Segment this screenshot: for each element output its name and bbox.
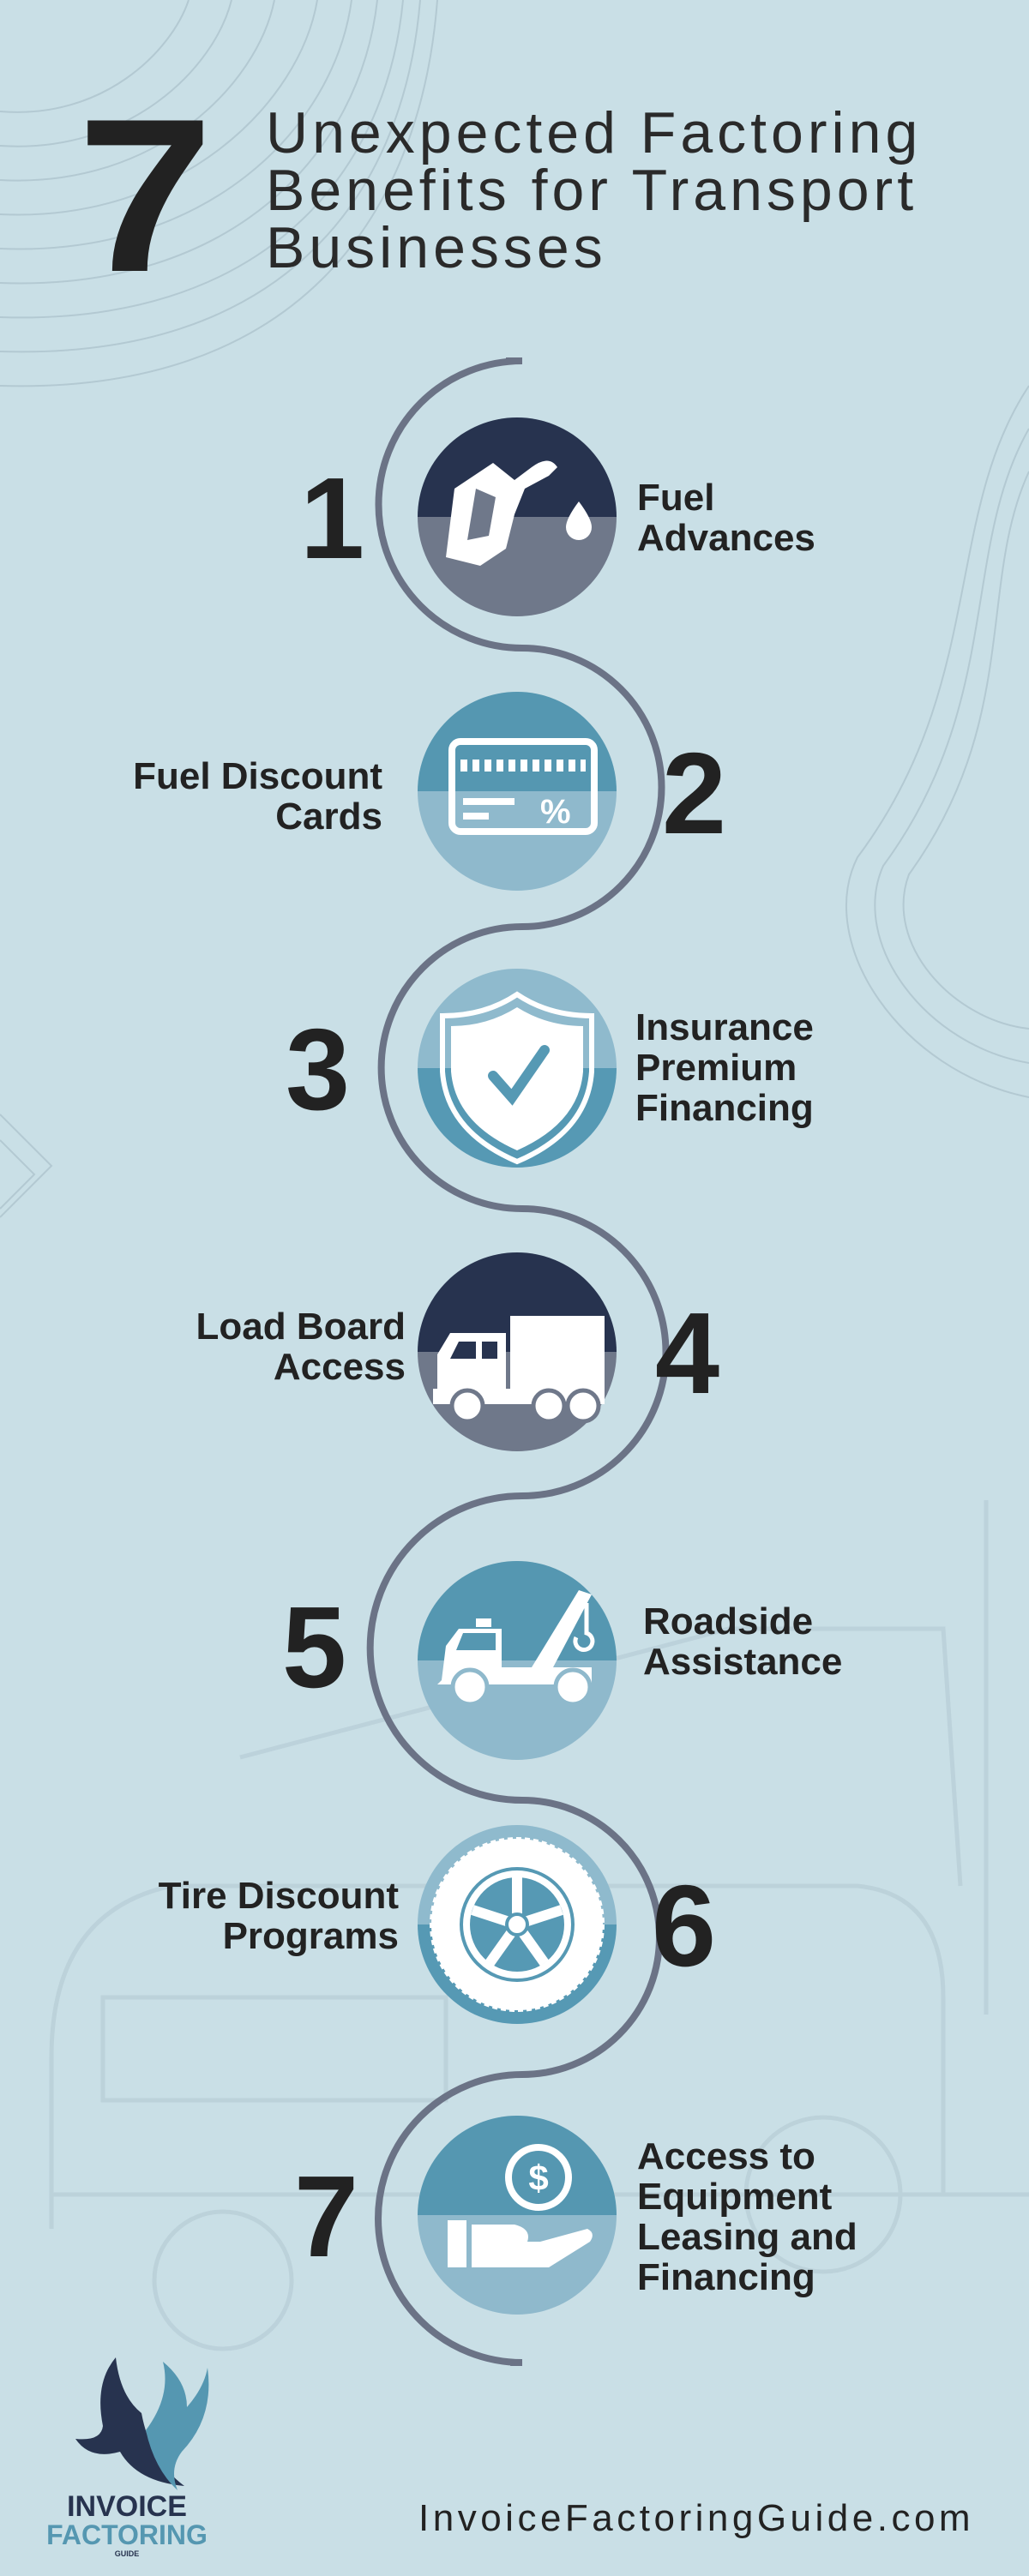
label: Equipment: [637, 2176, 833, 2218]
item 5: roadside: [282, 1561, 842, 1760]
number 6: 6: [652, 1861, 716, 1991]
icon: tow truck: [437, 1590, 592, 1704]
label: Cards: [275, 796, 382, 838]
number 2: 2: [662, 729, 726, 858]
label: Access: [274, 1346, 406, 1388]
logo: [46, 2357, 208, 2558]
label: Fuel Discount: [133, 755, 382, 797]
label: Financing: [637, 2256, 815, 2298]
label: Tire Discount: [159, 1875, 399, 1917]
icon: truck: [433, 1316, 605, 1421]
item 3: insurance: [286, 969, 814, 1168]
item 2: fuel discount cards: %: [540, 793, 571, 831]
label: Programs: [223, 1915, 399, 1957]
title text: Unexpected Factoring: [266, 100, 922, 165]
label: Access to: [637, 2135, 815, 2177]
snake path connector: [370, 361, 665, 2363]
label: Premium: [635, 1047, 797, 1089]
number 3: 3: [286, 1005, 350, 1134]
logo: INVOICE: [67, 2490, 187, 2523]
icon: tire: [431, 1839, 603, 2010]
item 1: fuel advances: [300, 417, 815, 616]
title text: Benefits for Transport: [266, 158, 918, 223]
label: Insurance: [635, 1006, 814, 1048]
logo: FACTORING: [46, 2519, 208, 2550]
number 1: 1: [300, 453, 364, 583]
title text: Businesses: [266, 215, 607, 280]
label: Leasing and: [637, 2216, 858, 2258]
logo: GUIDE: [115, 2549, 139, 2558]
label: Advances: [637, 517, 815, 559]
label: Financing: [635, 1087, 814, 1129]
label: Assistance: [643, 1641, 842, 1683]
label: Load Board: [196, 1306, 406, 1348]
number 5: 5: [282, 1582, 346, 1712]
icon: shield: [442, 994, 592, 1162]
label: Roadside: [643, 1600, 813, 1642]
title: big number 7: 7: [77, 74, 214, 318]
icon: card: [452, 742, 594, 832]
item 6: tire discount: [159, 1825, 716, 2024]
label: Fuel: [637, 477, 714, 519]
footer url: InvoiceFactoringGuide.com: [418, 2497, 974, 2539]
item 7: equipment leasing: $: [528, 2158, 549, 2198]
icon: hand with coin: [508, 2147, 569, 2207]
item 7: equipment leasing: [294, 2116, 858, 2315]
icon: fuel nozzle: [446, 461, 592, 566]
title text: [266, 100, 922, 280]
icon: eagle wings: [75, 2357, 184, 2486]
number 7: 7: [294, 2152, 358, 2281]
item 2: fuel discount cards: [133, 692, 726, 891]
number 4: 4: [655, 1288, 719, 1418]
item 4: load board: [196, 1252, 719, 1451]
